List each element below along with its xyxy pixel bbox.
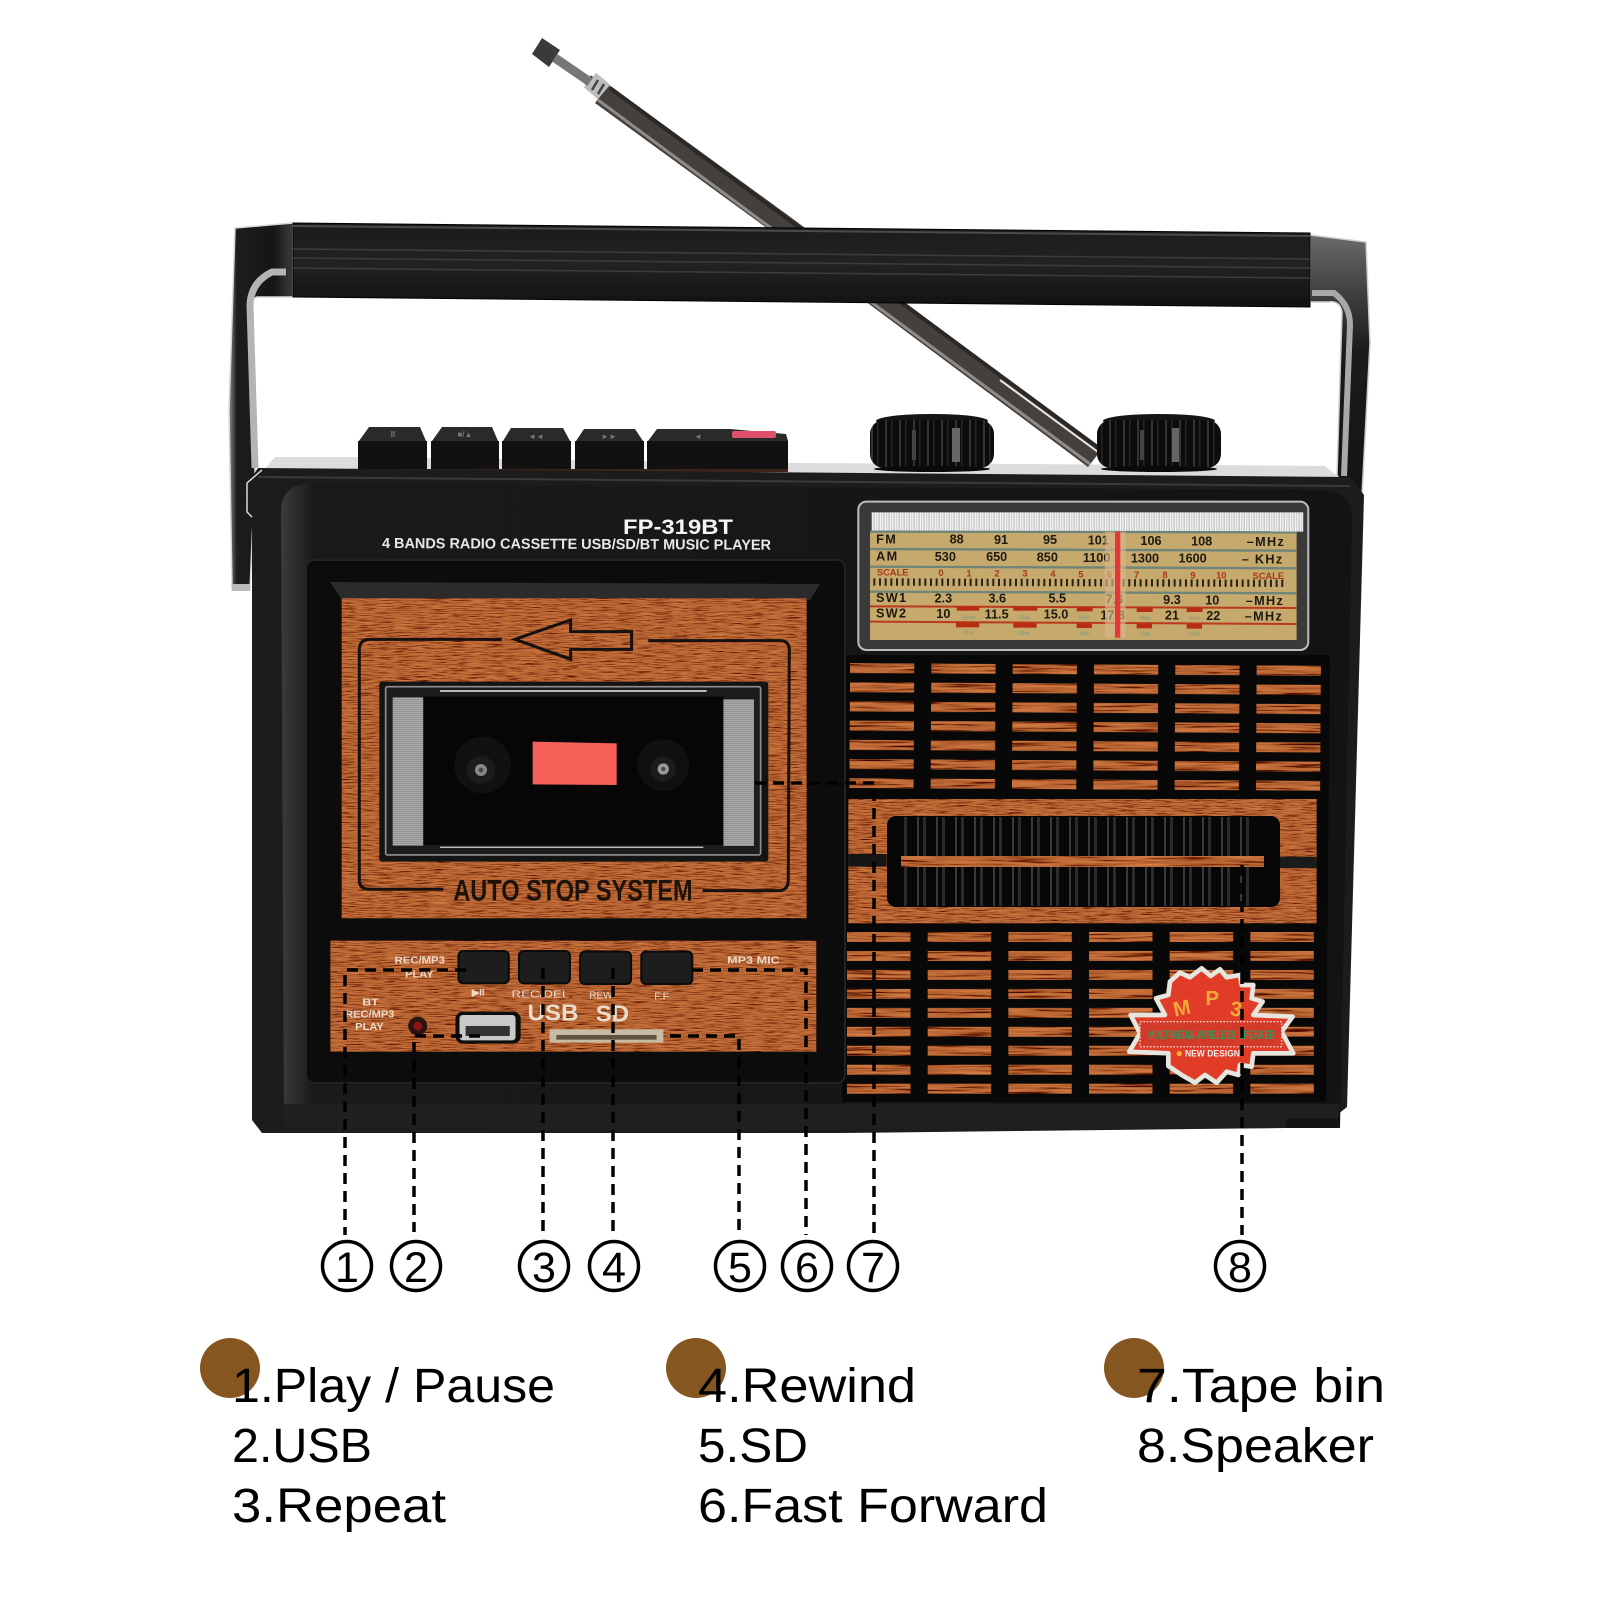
auto stop label: AUTO STOP SYSTEM [453, 875, 693, 908]
cassette recess [306, 560, 845, 1083]
scale numbers: 10 [1216, 571, 1226, 581]
FM row: –MHz [1247, 535, 1285, 549]
scale numbers: SCALE [877, 568, 908, 578]
tape keys [358, 427, 788, 472]
FM row: FM [876, 532, 897, 546]
metre band labels: 19m [1079, 631, 1090, 637]
panel labels: MP3 MIC [727, 955, 780, 966]
panel labels [345, 955, 780, 1033]
key symbols: ◄ [694, 432, 702, 441]
scale numbers [877, 568, 1284, 581]
scale numbers: 3 [1022, 569, 1028, 579]
FM row: 101 [1088, 533, 1109, 547]
FM row: 88 [950, 532, 964, 546]
speaker centre panel [848, 799, 1317, 923]
FM row: 10 [936, 607, 950, 621]
key symbols: ►► [601, 432, 617, 441]
MP3 badge [1129, 968, 1293, 1083]
function buttons [458, 951, 692, 984]
legend items: 4.Rewind [698, 1360, 916, 1413]
panel labels: SD [596, 1001, 629, 1027]
brown dot [1104, 1338, 1164, 1398]
legend items: 7.Tape bin [1137, 1360, 1385, 1413]
FM row: 11.5 [985, 607, 1009, 621]
legend items: 1.Play / Pause [232, 1360, 555, 1413]
legend column 2 [666, 1338, 1048, 1533]
radio body [247, 468, 1364, 1133]
tuning dial [858, 502, 1308, 650]
marker numerals: 7 [861, 1244, 885, 1292]
tick marks [873, 582, 1287, 583]
FM row: AM [876, 549, 899, 563]
FM row: 850 [1037, 550, 1058, 564]
panel labels: USB [527, 1000, 578, 1026]
left chrome bracket [229, 223, 293, 590]
metre band labels: 120m [961, 615, 976, 621]
eject arrow [515, 620, 632, 659]
LED indicator [408, 1017, 427, 1035]
scale numbers: 7 [1134, 570, 1139, 580]
panel labels: ▶II [471, 986, 484, 997]
marker numerals: 6 [795, 1244, 819, 1292]
panel wood [330, 941, 816, 1052]
key symbols [391, 430, 702, 441]
FM row: 106 [1140, 534, 1162, 548]
door frame [330, 582, 820, 600]
FM row: 91 [994, 533, 1008, 547]
panel labels: F.F [654, 991, 669, 1002]
badge banner [1140, 1022, 1282, 1047]
marker numerals: 5 [728, 1244, 752, 1292]
marker numerals: 8 [1228, 1244, 1252, 1292]
number markers [322, 1242, 1264, 1290]
tape window [379, 682, 768, 862]
dial scale face [870, 532, 1297, 640]
door outline [359, 639, 789, 891]
key symbols: ◄◄ [528, 432, 544, 441]
scale numbers: 1 [966, 568, 972, 578]
FM row: 2.3 [935, 591, 952, 605]
legend items [698, 1360, 1048, 1533]
brown dot [200, 1338, 260, 1398]
door wood panel [342, 598, 807, 918]
panel labels: REC/DEL [512, 990, 570, 1001]
marker numerals [335, 1244, 1252, 1292]
telescopic antenna [532, 38, 1102, 467]
metre band labels: 75m [1018, 615, 1030, 621]
MP3 badge: NEW DESIGN [1185, 1049, 1240, 1059]
brown dot [666, 1338, 726, 1398]
metre band labels: 13m [1189, 632, 1200, 638]
legend items: 3.Repeat [232, 1480, 446, 1533]
metre band labels: 50m [1079, 615, 1090, 621]
metre band labels: 25m [1018, 631, 1030, 637]
FM row: 21 [1165, 609, 1179, 623]
dashed leader lines [345, 783, 1242, 1235]
panel labels: REC/MP3 [395, 955, 445, 966]
left reel [454, 737, 511, 793]
legend column 1 [200, 1338, 555, 1533]
legend items: 6.Fast Forward [698, 1480, 1048, 1533]
FM row: 15.0 [1044, 608, 1068, 622]
SD slot [550, 1029, 663, 1043]
FM row: –MHz [1245, 610, 1283, 624]
MP3 badge: P [1205, 987, 1219, 1010]
FM row: 95 [1043, 533, 1057, 547]
model title: FP-319BT [623, 516, 733, 539]
top silver deck [262, 457, 1342, 480]
bottom band [284, 1104, 1340, 1133]
label window [533, 742, 617, 785]
speaker black backing [842, 655, 1330, 1102]
FM row: 3.6 [989, 591, 1006, 605]
FM row: 650 [986, 550, 1007, 564]
scale numbers: 0 [938, 568, 944, 578]
control panel [330, 941, 816, 1052]
MP3 badge: 3 [1228, 997, 1244, 1022]
model title: 4 BANDS RADIO CASSETTE USB/SD/BT MUSIC PLAYER [382, 536, 772, 554]
scale numbers: 6 [1107, 570, 1112, 580]
legend items: 8.Speaker [1137, 1420, 1374, 1473]
black handle grip [293, 223, 1310, 307]
metre band labels: 31m [963, 631, 974, 637]
panel labels: REC/MP3 [345, 1010, 395, 1021]
legend items [1137, 1360, 1385, 1473]
panel labels: PLAY [405, 969, 434, 980]
scale numbers: 2 [994, 569, 1000, 579]
USB port [455, 1012, 521, 1044]
carry handle [229, 223, 1370, 591]
tuning pointer [1105, 532, 1126, 638]
FM row: 22 [1206, 609, 1220, 623]
upper slats [849, 663, 1321, 791]
badge text: MULTIMEDIA WIRELESS SPEAKER [1148, 1028, 1275, 1042]
metre band labels: 41m [1189, 616, 1200, 622]
FM row: SW1 [876, 591, 907, 605]
metre band labels: 49m [1139, 616, 1151, 622]
FM row: 1600 [1179, 552, 1207, 566]
FM row: 7.6 [1106, 593, 1123, 607]
scale numbers: 9 [1190, 570, 1196, 580]
FM row: 17.8 [1100, 608, 1125, 622]
model title [382, 516, 772, 554]
panel labels: REW [589, 991, 613, 1002]
scale numbers: SCALE [1252, 571, 1284, 581]
radio illustration [229, 38, 1370, 1133]
legend items: 5.SD [698, 1420, 808, 1473]
metre band labels [961, 615, 1200, 638]
red record key [732, 431, 776, 438]
marker numerals: 4 [602, 1244, 626, 1292]
FM row: 1100 [1083, 551, 1110, 565]
legend column 3 [1104, 1338, 1385, 1473]
lower slats [847, 932, 1314, 1094]
marker numerals: 2 [404, 1244, 428, 1292]
FM row: 108 [1191, 534, 1212, 548]
FM row: SW2 [876, 606, 907, 620]
right chrome bracket [1310, 235, 1370, 495]
scale numbers: 5 [1078, 569, 1084, 579]
FM row: 10 [1205, 593, 1219, 607]
key symbols: II [391, 430, 395, 439]
FM row: 5.5 [1049, 592, 1066, 606]
left knob [870, 414, 994, 472]
FM row [876, 532, 1285, 624]
panel labels: PLAY [355, 1022, 384, 1033]
FM row: 530 [935, 550, 956, 564]
key symbols: ■/▲ [458, 430, 472, 439]
FM row: 1300 [1131, 551, 1159, 565]
scale numbers: 8 [1162, 570, 1168, 580]
right knob [1097, 414, 1221, 472]
speaker grille [847, 663, 1321, 1094]
right reel [637, 739, 689, 791]
FM row: – KHz [1242, 552, 1284, 566]
MP3 badge: M [1171, 996, 1193, 1022]
red band markers [956, 607, 1203, 629]
marker numerals: 1 [335, 1244, 359, 1292]
speaker slot [887, 816, 1280, 907]
striped top [872, 512, 1303, 532]
FM row: 9.3 [1163, 593, 1181, 607]
marker numerals: 3 [532, 1244, 556, 1292]
legend items: 2.USB [232, 1420, 372, 1473]
FM row: –MHz [1246, 594, 1284, 608]
cassette door [342, 598, 807, 918]
dial bezel [858, 502, 1308, 650]
panel labels: BT [362, 997, 380, 1008]
metre band labels: 15m [1139, 632, 1151, 638]
legend items [232, 1360, 555, 1533]
scale numbers: 4 [1050, 569, 1056, 579]
